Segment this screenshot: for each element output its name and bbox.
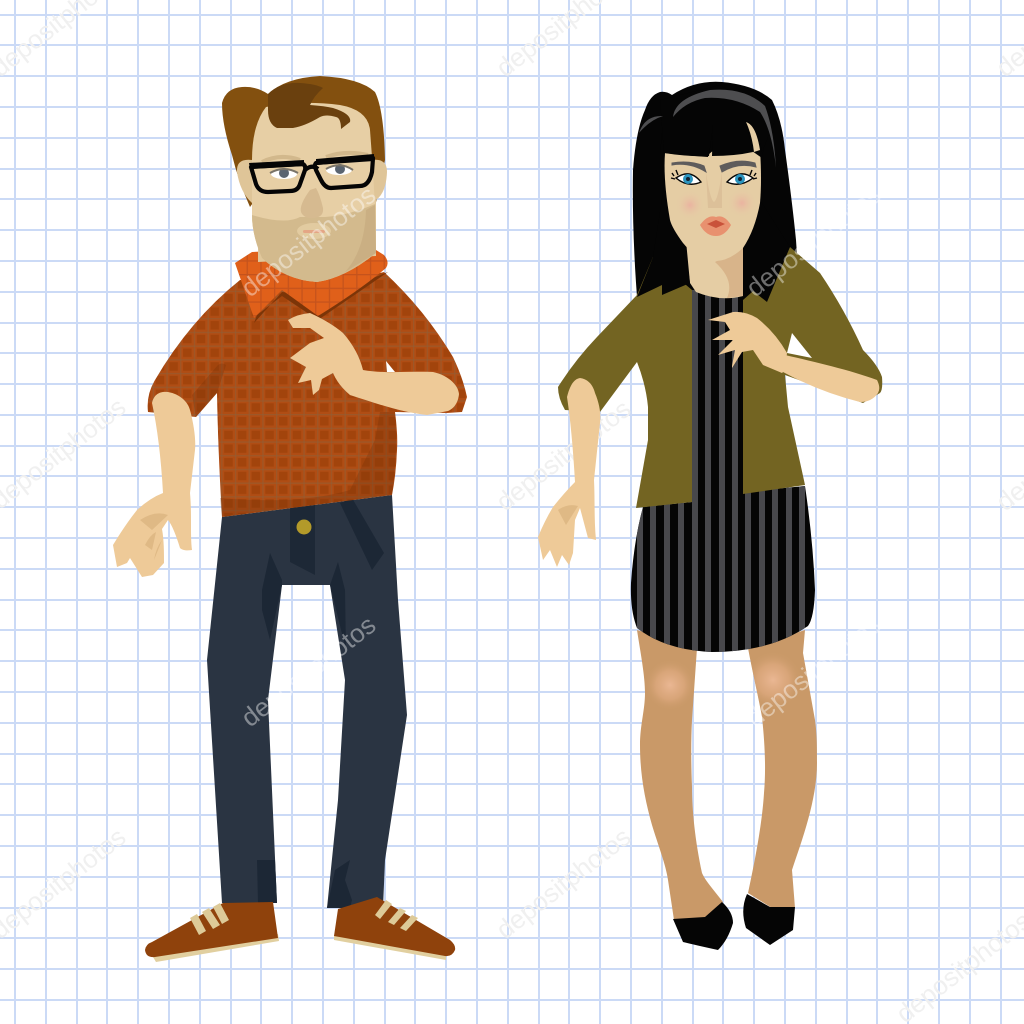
jeans shadows: [257, 498, 384, 908]
woman temple skin: [746, 122, 760, 152]
man right ear: [372, 160, 387, 201]
woman neck shade: [715, 248, 743, 298]
man left arm and hand: [113, 392, 195, 577]
woman right hand: [708, 312, 787, 373]
woman right shoe: [743, 894, 795, 945]
man right hand: [288, 313, 370, 398]
woman right forearm: [783, 355, 879, 402]
watermarks over figures: [235, 179, 886, 733]
man jeans: [207, 495, 407, 908]
man brows: [262, 153, 368, 162]
hair highlights: [639, 90, 776, 168]
man left ear: [237, 160, 252, 203]
woman left arm and hand: [538, 378, 600, 567]
man nose: [301, 188, 323, 218]
man right forearm: [345, 370, 459, 415]
man beard shade: [345, 205, 376, 272]
man left hand shade: [140, 513, 168, 560]
man neck: [258, 200, 376, 262]
woman neck: [685, 245, 743, 298]
figure: man: [113, 76, 467, 962]
man face: [252, 103, 376, 282]
woman legs: [637, 630, 817, 920]
watermarks over figures: depositphotos: [235, 179, 381, 303]
woman left eye: [671, 170, 701, 184]
woman left hand shade: [558, 505, 578, 525]
man mouth: [297, 223, 331, 239]
watermarks on background: depositphotos: [490, 821, 636, 945]
woman eyebrows: [672, 161, 756, 172]
woman hair back: [633, 82, 800, 300]
woman knees: [652, 660, 793, 702]
man quiff: [268, 83, 350, 129]
woman jacket: [558, 247, 882, 508]
woman left shoe: [673, 902, 733, 950]
man eyes: [270, 164, 353, 179]
watermarks over figures: depositphotos: [740, 179, 886, 303]
woman hair front locks: [637, 180, 790, 302]
man beard: [252, 204, 376, 282]
man glasses: [249, 154, 374, 192]
figure: woman: [538, 82, 882, 950]
woman nose shade: [706, 172, 722, 208]
woman lips: [700, 216, 731, 236]
woman face: [665, 150, 761, 261]
shirt shadows: [192, 364, 396, 517]
woman bangs: [660, 90, 770, 158]
man left shoe: [145, 902, 279, 962]
watermarks over figures: depositphotos: [235, 609, 381, 733]
woman right eye: [727, 170, 757, 184]
man shirt: [148, 272, 467, 517]
man hair back: [222, 76, 385, 207]
armpit gap: [386, 361, 395, 372]
jeans button: [296, 520, 312, 534]
armpit gap: [787, 333, 812, 358]
watermarks on background: depositphotos: [490, 393, 636, 517]
woman dress: [625, 285, 820, 655]
woman cheeks: [675, 188, 757, 220]
watermarks over figures: depositphotos: [740, 609, 886, 733]
man right shoe: [334, 897, 455, 960]
man collar: [235, 250, 388, 323]
